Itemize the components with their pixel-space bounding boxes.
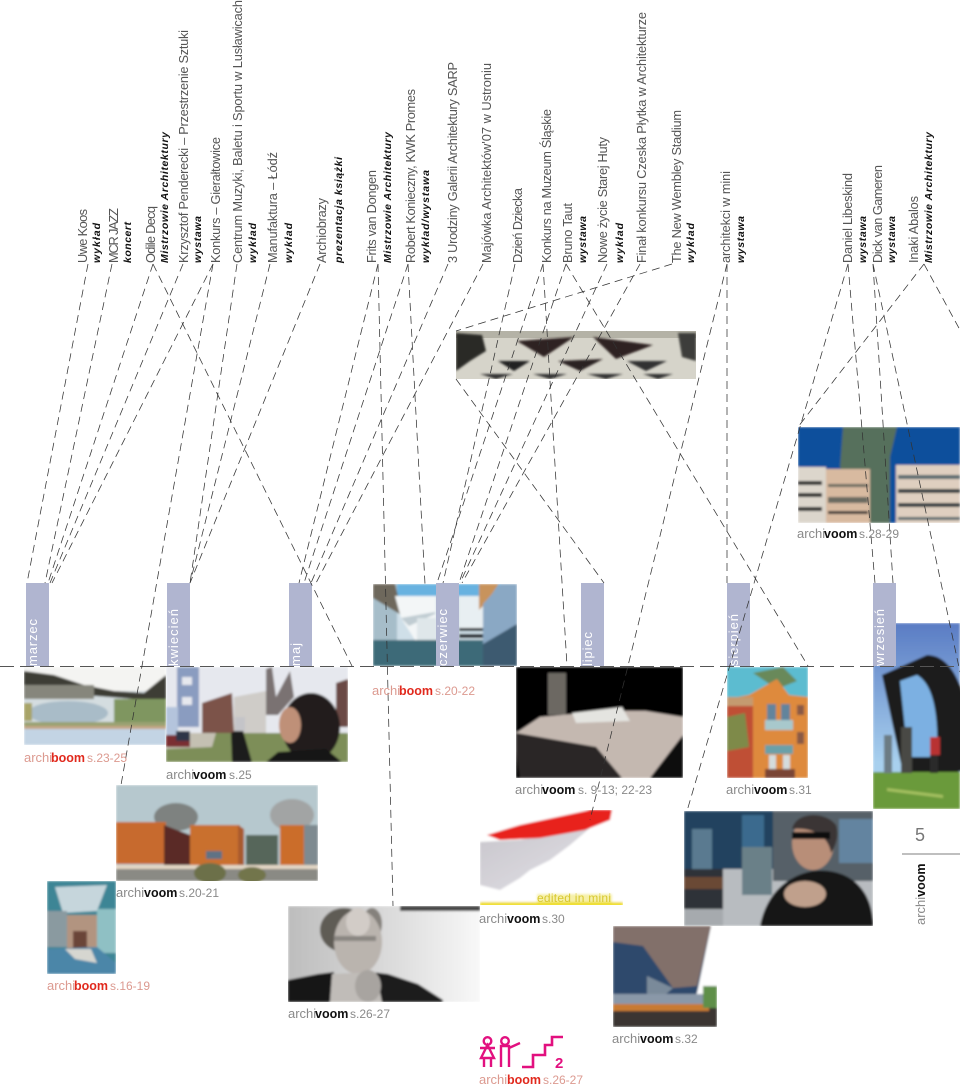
event: MCR JAZZ <box>106 208 134 263</box>
event: Robert Konieczny: Robert Konieczny, KWK Promes <box>403 89 418 263</box>
captions <box>24 526 899 1085</box>
event: The New Wembley Stadium: The New Wembley Stadium <box>669 110 684 263</box>
event: Odile Decq <box>143 131 171 263</box>
photo: red form with yellow bar <box>480 810 623 905</box>
caption: s.26-27: s.26-27 <box>350 1007 390 1021</box>
caption: s.25: voom <box>193 768 226 782</box>
event: The New Wembley Stadium <box>669 110 697 263</box>
event: Krzysztof Penderecki: wystawa <box>192 216 204 263</box>
event: Frits van Dongen <box>364 131 394 263</box>
month: czerwiec: czerwiec <box>435 608 450 666</box>
caption: s.20-22: boom <box>399 684 433 698</box>
event: Finał konkursu: Finał konkursu Czeska Płytka w Architekturze <box>634 12 649 263</box>
event: Robert Konieczny: wykład/wystawa <box>420 170 432 263</box>
event: Dick van Gameren <box>870 165 898 263</box>
photo: wembley underside <box>613 926 717 1027</box>
photo: metal facade panel <box>456 331 696 379</box>
month bars <box>25 583 896 667</box>
event: Manufaktura: wykład <box>283 222 295 263</box>
event: Nowe życie Starej Huty <box>595 136 626 263</box>
month: lipiec <box>580 583 604 666</box>
event: Inaki Abalos: Mistrzowie Architektury <box>923 131 935 263</box>
caption: s.23-25: s.23-25 <box>87 751 127 765</box>
event: Frits van Dongen: Mistrzowie Architektury <box>382 131 394 263</box>
event: Dzień Dziecka: Dzień Dziecka <box>510 187 525 263</box>
event: Nowe życie Starej Huty: wykład <box>614 222 626 263</box>
event: architekci w mini <box>718 171 747 263</box>
month: wrzesień: wrzesień <box>872 609 887 667</box>
caption: s.32: voom <box>640 1032 673 1046</box>
caption: s. 9-13; 22-23: s. 9-13; 22-23 <box>578 783 652 797</box>
caption: s. 9-13; 22-23: archi <box>515 782 543 797</box>
photo: interior with skylight <box>373 584 517 666</box>
month: maj: maj <box>288 643 303 666</box>
event: Uwe Koos: Uwe Koos <box>75 209 90 263</box>
event: 3 Urodziny: 3 Urodziny Galerii Architektury SARP <box>445 62 460 263</box>
caption: s.16-19: archi <box>47 978 75 993</box>
event: Archiobrazy <box>314 156 345 264</box>
event: Dick van Gameren: wystawa <box>886 216 898 263</box>
photo: giant letter D <box>873 623 960 809</box>
photo: glass atrium <box>47 881 116 974</box>
event: Daniel Libeskind: wystawa <box>857 216 869 263</box>
caption: s.26-27: voom <box>315 1007 348 1021</box>
event: architekci w mini: wystawa <box>735 216 747 263</box>
event: Manufaktura <box>265 152 295 263</box>
event: Dick van Gameren: Dick van Gameren <box>870 165 885 263</box>
photo: blue sky tower <box>798 427 960 523</box>
event: Centrum Muzyki <box>230 0 259 263</box>
photo: Frits van Dongen portrait <box>288 906 480 1002</box>
caption: s.16-19: s.16-19 <box>110 979 150 993</box>
event: Odile Decq: Odile Decq <box>143 206 158 263</box>
event: Archiobrazy: prezentacja książki <box>333 156 345 264</box>
caption: s.31: voom <box>754 783 787 797</box>
event: Bruno Taut <box>560 203 589 263</box>
event: Krzysztof Penderecki: Krzysztof Penderecki – Przestrzenie Sztuki <box>176 30 191 263</box>
caption: s.20-22: s.20-22 <box>435 684 475 698</box>
photo: landscape plan <box>24 668 166 745</box>
caption: s.25: archi <box>166 767 194 782</box>
event: Konkurs na Muzeum Śląskie: Konkurs na Muzeum Śląskie <box>539 109 554 263</box>
event: The New Wembley Stadium: wykład <box>685 222 697 263</box>
month: lipiec: lipiec <box>580 632 595 666</box>
page number: 5 <box>915 825 925 845</box>
event: Majówka: Majówka Architektów'07 w Ustroniu <box>479 63 494 263</box>
event: Frits van Dongen: Frits van Dongen <box>364 170 379 263</box>
month: marzec <box>25 583 49 666</box>
event: Daniel Libeskind: Daniel Libeskind <box>840 173 855 263</box>
month: kwiecień <box>166 583 190 666</box>
icon: pink children and stairs <box>480 1037 563 1072</box>
event: Uwe Koos: wykład <box>91 222 103 263</box>
month: wrzesień <box>872 583 896 667</box>
photo: woman with camera <box>166 667 348 762</box>
event: Krzysztof Penderecki <box>176 30 204 263</box>
caption: s.23-25: boom <box>51 751 85 765</box>
month: sierpień <box>726 583 750 666</box>
caption: s.32: archi <box>612 1031 640 1046</box>
event: Manufaktura: Manufaktura – Łódź <box>265 152 280 263</box>
event labels <box>75 0 935 264</box>
caption: s.31: archi <box>726 782 754 797</box>
caption: s.26-27: archi <box>288 1006 316 1021</box>
event: MCR JAZZ: MCR JAZZ <box>106 208 121 263</box>
caption: s.20-21: voom <box>144 886 177 900</box>
event: Uwe Koos <box>75 209 103 263</box>
vertical magazine title: archivoom <box>913 863 928 925</box>
caption: s.20-21: archi <box>116 885 144 900</box>
event: Konkurs Gierałtowice: Konkurs – Gierałtowice <box>208 137 223 263</box>
month: kwiecień: kwiecień <box>166 609 181 666</box>
caption: s.30: s.30 <box>542 912 565 926</box>
caption: s.30: archi <box>479 911 507 926</box>
event: Inaki Abalos <box>906 131 935 263</box>
footer divider <box>902 853 960 855</box>
icon: pink children and stairs: 2 <box>555 1055 563 1072</box>
caption: s.23-25: archi <box>24 750 52 765</box>
month: marzec: marzec <box>25 618 40 666</box>
timeline dashed axis <box>0 666 960 668</box>
caption: s.28-29: s.28-29 <box>859 527 899 541</box>
event: Centrum Muzyki: Centrum Muzyki, Baletu i Sportu w Lusławicach <box>230 0 245 263</box>
caption: s.25: s.25 <box>229 768 252 782</box>
caption: s.32: s.32 <box>675 1032 698 1046</box>
text: edited in mini: edited in mini <box>537 891 611 905</box>
caption: s.20-21: s.20-21 <box>179 886 219 900</box>
photo: architectural model on black <box>516 667 683 778</box>
caption: s.28-29: archi <box>797 526 825 541</box>
photo: orange house <box>727 667 808 778</box>
caption: s.20-22: archi <box>372 683 400 698</box>
event: architekci w mini: architekci w mini <box>718 171 733 263</box>
photo: orange building <box>116 785 318 881</box>
event: Inaki Abalos: Inaki Abalos <box>906 196 921 263</box>
caption: s. 9-13; 22-23: voom <box>542 783 575 797</box>
event: MCR JAZZ: koncert <box>122 222 134 263</box>
caption: s.28-29: voom <box>824 527 857 541</box>
event: Centrum Muzyki: wykład <box>247 222 259 263</box>
month: sierpień: sierpień <box>726 614 741 666</box>
month: czerwiec <box>435 583 459 666</box>
event: Archiobrazy: Archiobrazy <box>314 197 329 263</box>
event: Odile Decq: Mistrzowie Architektury <box>159 131 171 263</box>
photo: Daniel Libeskind portrait <box>684 811 873 926</box>
month: maj <box>288 583 312 666</box>
caption: s.16-19: boom <box>74 979 108 993</box>
caption: s.31: s.31 <box>789 783 812 797</box>
caption: s.30: voom <box>507 912 540 926</box>
event: Daniel Libeskind <box>840 173 869 263</box>
event: Bruno Taut: wystawa <box>577 216 589 263</box>
event: Bruno Taut: Bruno Taut <box>560 203 575 263</box>
dashed connector lines <box>27 264 960 906</box>
event: Robert Konieczny <box>403 89 432 263</box>
event: Nowe życie Starej Huty: Nowe życie Starej Huty <box>595 136 610 263</box>
